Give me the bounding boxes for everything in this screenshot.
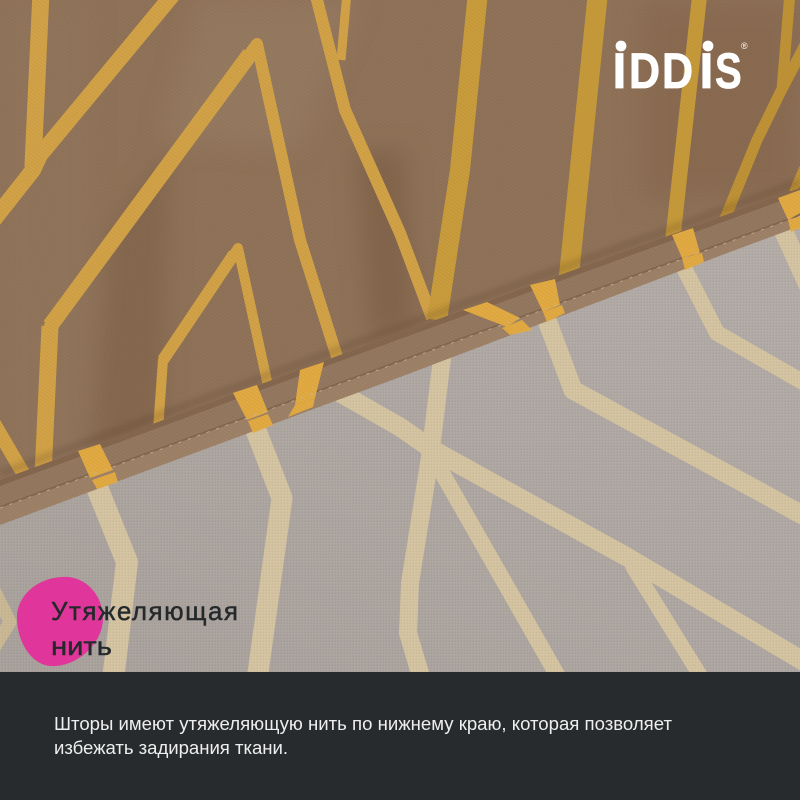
gold pattern lines on upper fabric (0, 0, 800, 485)
heading: weighting thread: Утяжеляющая (51, 596, 238, 626)
pink blob (17, 577, 103, 666)
hem with weighting thread (0, 188, 800, 525)
stitch line (0, 216, 800, 508)
logo: iddis (612, 41, 748, 99)
panel: dark caption (0, 672, 800, 800)
logo: iddis: I (700, 43, 713, 99)
caption text (54, 713, 672, 758)
panel: lower curtain fabric (0, 200, 800, 680)
logo: iddis: D (662, 43, 693, 99)
caption text: Шторы имеют утяжеляющую нить по нижнему краю, которая позволяет (54, 713, 672, 734)
heading: weighting thread: нить (51, 631, 112, 661)
logo: iddis: ® (741, 41, 748, 51)
pale pattern lines on lower fabric (0, 230, 800, 680)
heading: weighting thread (51, 596, 238, 661)
logo: iddis: S (715, 43, 742, 99)
logo: iddis: I (612, 43, 626, 99)
rolled hem (0, 188, 800, 508)
gold bands on hem (78, 190, 800, 489)
logo: iddis: D (629, 43, 660, 99)
panel: upper curtain fabric (0, 0, 800, 520)
stitched hem strip (0, 216, 800, 525)
caption text: избежать задирания ткани. (54, 737, 288, 758)
